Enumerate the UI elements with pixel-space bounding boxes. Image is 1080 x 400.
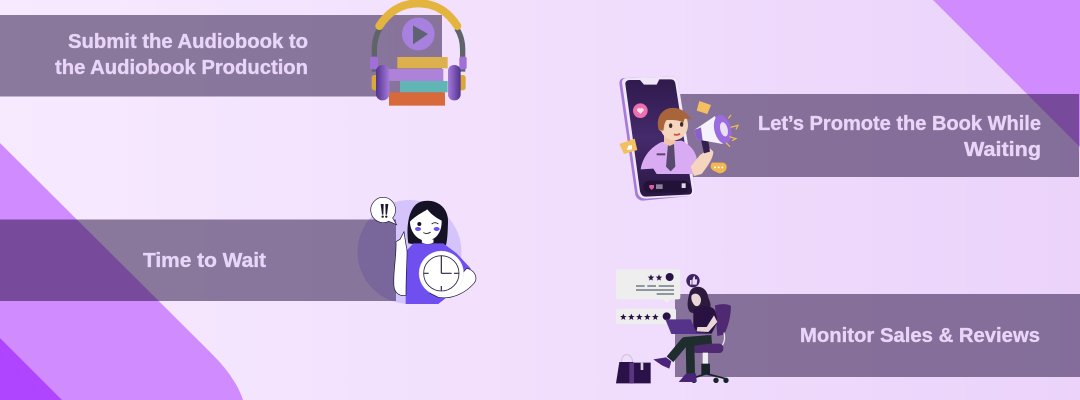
step banner 4 <box>675 294 1080 377</box>
heading: monitor sales and reviews: Monitor Sales & Reviews <box>800 325 1040 347</box>
chair <box>691 304 731 383</box>
shopping bags <box>616 355 651 383</box>
heading: promote the book: Waiting <box>964 139 1041 161</box>
icon: woman on laptop with reviews <box>616 269 731 383</box>
step banner 1 <box>0 15 442 96</box>
thumbs up badge <box>686 274 700 287</box>
man <box>641 108 713 176</box>
review card <box>616 269 680 303</box>
heading: time to wait: Time to Wait <box>143 250 266 272</box>
icon: man with megaphone in phone <box>619 77 738 201</box>
heading: promote the book <box>758 113 1041 161</box>
icon backdrop: circle behind woman with clock <box>358 200 462 304</box>
heading: submit the audiobook: the Audiobook Production <box>55 57 308 79</box>
phone <box>619 77 695 201</box>
woman <box>653 287 717 382</box>
laptop <box>665 319 705 334</box>
step banner 2 <box>0 220 396 301</box>
megaphone <box>694 113 738 153</box>
icon: woman holding clock <box>371 197 476 304</box>
decorative corner: top right triangle <box>933 0 1080 147</box>
heading: submit the audiobook: Submit the Audiobook to <box>68 31 308 53</box>
five star review <box>616 309 676 324</box>
heading: promote the book: Let’s Promote the Book While <box>758 113 1041 135</box>
decorative corner: bottom left shape <box>0 143 243 400</box>
icon: headphones with books and play button <box>370 3 467 106</box>
step banner 3 <box>680 94 1079 177</box>
decorative corner: bottom left dark triangle <box>0 338 62 400</box>
legs <box>670 339 712 359</box>
speech bubble <box>371 197 397 225</box>
heading: submit the audiobook <box>55 31 308 79</box>
clock <box>419 251 464 296</box>
